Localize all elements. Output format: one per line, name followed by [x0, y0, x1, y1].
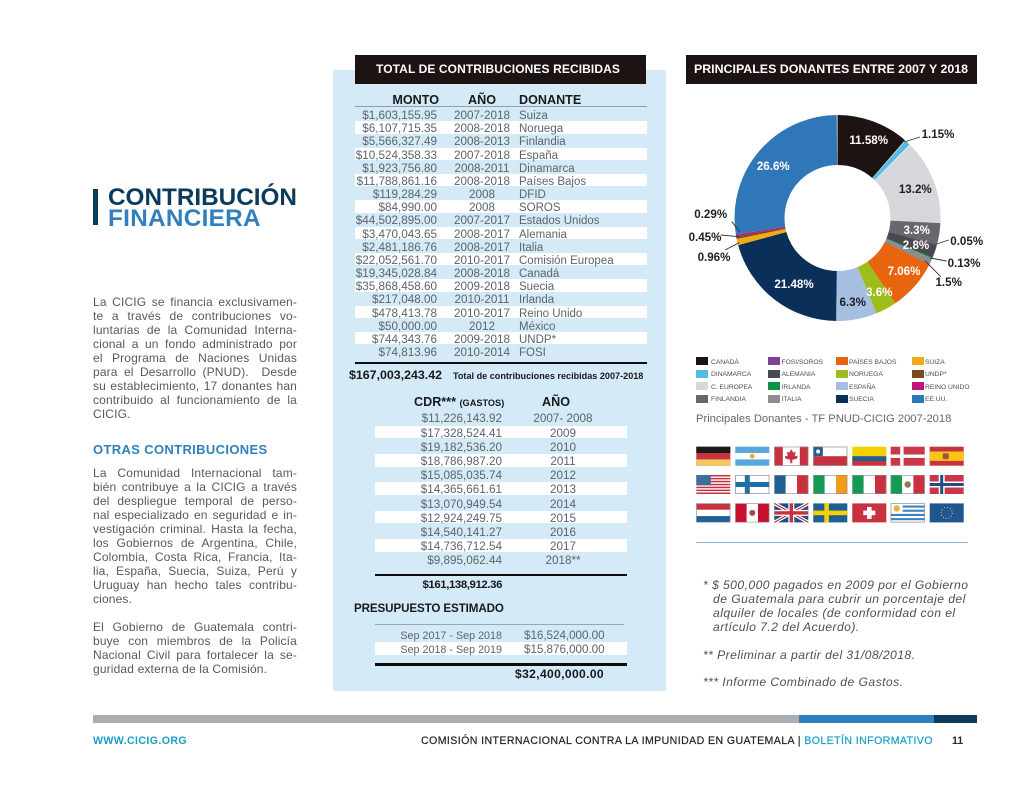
text block: otras contribuciones — [93, 466, 297, 606]
table: total de contribuciones: Canadá — [519, 268, 559, 280]
table: total de contribuciones: UNDP* — [519, 334, 556, 346]
legend: donantes: IRLANDA — [782, 384, 810, 391]
table: CDR gastos: $11,226,143.92 — [422, 412, 502, 425]
table: total de contribuciones: $167,003,243.42 — [349, 368, 442, 382]
table: total de contribuciones: 2007-2018 — [454, 148, 510, 162]
donut chart: principales donantes: 3.6% — [866, 286, 893, 299]
table: CDR gastos: $14,365,661.61 — [421, 483, 502, 496]
table: total de contribuciones: FOSI — [519, 347, 546, 359]
table: total de contribuciones: $11,788,861.16 — [357, 175, 437, 188]
table: total de contribuciones: $35,868,458.60 — [356, 280, 437, 293]
table: CDR gastos: $16,524,000.00 — [524, 629, 605, 642]
heading: principales donantes: PRINCIPALES DONANTES ENTRE 2007 Y 2018 — [694, 62, 968, 76]
table: CDR gastos: Sep 2018 - Sep 2019 — [400, 644, 502, 656]
footnotes: * $ 500,000 pagados en 2009 por el Gobierno — [703, 578, 968, 592]
donut chart: principales donantes: 26.6% — [757, 160, 790, 173]
table: CDR gastos: Sep 2017 - Sep 2018 — [400, 630, 502, 642]
table: total de contribuciones: 2008-2018 — [454, 175, 510, 188]
text block: otras contribuciones: del despliegue temporal de perso- — [93, 494, 297, 508]
flag: European Union — [930, 503, 964, 522]
table: CDR gastos: $17,328,524.41 — [421, 427, 502, 440]
table: total de contribuciones: Irlanda — [519, 294, 554, 306]
table: total de contribuciones: $1,603,155.95 — [362, 109, 437, 122]
table: total de contribuciones: Dinamarca — [519, 163, 575, 175]
table: total de contribuciones: $478,413.78 — [372, 307, 437, 320]
table: CDR gastos: 2017 — [550, 540, 576, 553]
table: total de contribuciones: Comisión Europea — [519, 255, 614, 267]
flag: Netherlands — [696, 503, 730, 522]
donut chart: principales donantes: 0.45% — [689, 231, 721, 244]
flag: USA — [696, 475, 730, 494]
flag: Switzerland — [852, 503, 886, 522]
table: total de contribuciones: 2010-2011 — [454, 293, 510, 306]
footnotes: *** Informe Combinado de Gastos. — [703, 675, 903, 689]
text block: intro — [93, 295, 297, 421]
legend: donantes: ESPAÑA — [849, 384, 876, 391]
table: CDR gastos: 2013 — [550, 483, 576, 496]
footer: website: WWW.CICIG.ORG — [93, 734, 187, 746]
text block: otras contribuciones: bién contribuye a la CICIG a través — [93, 480, 297, 494]
legend: donantes: DINAMARCA — [711, 371, 751, 378]
table: CDR gastos: 2015 — [550, 512, 576, 525]
legend: donantes: ALEMANIA — [782, 371, 815, 378]
legend: donantes: CANADÁ — [711, 358, 739, 366]
flag: Norway — [930, 475, 964, 494]
table: CDR gastos: 2011 — [550, 455, 576, 468]
donut chart: principales donantes: 1.15% — [922, 128, 954, 141]
legend: donantes: ITALIA — [782, 396, 801, 403]
table: CDR gastos: AÑO — [542, 395, 570, 409]
footnotes: de Guatemala para cubrir un porcentaje del — [713, 592, 966, 606]
donut chart: principales donantes: 11.58% — [849, 134, 888, 147]
legend: donantes: NORUEGA — [849, 371, 883, 378]
footnotes: ** Preliminar a partir del 31/08/2018. — [703, 648, 915, 662]
table: total de contribuciones: Países Bajos — [519, 176, 586, 188]
footer: publication line: COMISIÓN INTERNACIONAL CONTRA LA IMPUNIDAD EN GUATEMALA | BOLETÍN INFORMATIVO — [421, 734, 933, 746]
text block: gobierno de guatemala: buye con miembros de la Policía — [93, 634, 297, 648]
donut chart: principales donantes — [689, 115, 983, 321]
text block: otras contribuciones: lia, España, Suecia, Suiza, Perú y — [93, 564, 297, 578]
flag: Argentina — [735, 447, 769, 466]
legend: donantes: PAÍSES BAJOS — [849, 358, 896, 366]
table: total de contribuciones: 2010-2017 — [454, 307, 510, 320]
table: total de contribuciones: $2,481,186.76 — [362, 241, 437, 254]
table: total de contribuciones: Suiza — [519, 110, 548, 122]
text block: intro: La CICIG se financia exclusivamen- — [93, 295, 297, 309]
table: total de contribuciones: 2009-2018 — [454, 280, 510, 293]
text block: intro: su establecimiento, 17 donantes han — [93, 379, 297, 393]
table: total de contribuciones: 2008-2011 — [454, 162, 510, 175]
donut chart: principales donantes: 0.29% — [694, 208, 727, 221]
table: total de contribuciones: $3,470,043.65 — [362, 228, 437, 241]
table: total de contribuciones: MONTO — [392, 93, 439, 107]
text block: otras contribuciones: Uruguay han hecho tales contribu- — [93, 578, 297, 592]
table: total de contribuciones: 2012 — [469, 320, 495, 333]
legend: donantes: EE.UU. — [925, 396, 947, 403]
text block: gobierno de guatemala: Nacional Civil para fortalecer la se- — [93, 648, 297, 662]
flag: Ireland — [813, 475, 847, 494]
caption: principales donantes: Principales Donantes - TF PNUD-CICIG 2007-2018 — [696, 413, 951, 425]
table: total de contribuciones: 2009-2018 — [454, 333, 510, 346]
footnotes: alquiler de locales (de conformidad con el — [713, 606, 956, 620]
donut chart: principales donantes: 3.3% — [903, 224, 930, 237]
table: total de contribuciones: Estados Unidos — [519, 215, 600, 227]
table: total de contribuciones: Total de contribuciones recibidas 2007-2018 — [453, 371, 643, 381]
text block: otras contribuciones: vestigación criminal. Hasta la fecha, — [93, 522, 297, 536]
table: total de contribuciones: Noruega — [519, 123, 563, 135]
legend: donantes: SUIZA — [925, 358, 945, 366]
table: total de contribuciones: $10,524,358.33 — [356, 148, 437, 162]
donut chart: principales donantes: 21.48% — [774, 278, 814, 291]
table: total de contribuciones: México — [519, 321, 555, 333]
flag: Mexico — [891, 475, 925, 494]
donut chart: principales donantes: 0.13% — [948, 257, 980, 270]
text block: otras contribuciones: ciones. — [93, 592, 132, 606]
footer bar — [93, 715, 977, 723]
table: CDR gastos — [354, 394, 627, 680]
table: CDR gastos: $32,400,000.00 — [515, 666, 604, 680]
table: total de contribuciones: Reino Unido — [519, 308, 582, 320]
subheading: otras contribuciones: OTRAS CONTRIBUCIONES — [93, 442, 268, 457]
table: total de contribuciones: 2010-2017 — [454, 254, 510, 267]
flag: Finland — [735, 475, 769, 494]
donut chart: principales donantes: 1.5% — [935, 276, 962, 289]
table: CDR gastos: $14,540,141.27 — [421, 526, 502, 539]
table: total de contribuciones: $119,284.29 — [373, 188, 437, 201]
flag: France — [774, 475, 808, 494]
donut chart: principales donantes: 0.05% — [950, 235, 983, 248]
table: total de contribuciones: 2008-2017 — [454, 241, 510, 254]
donut chart: principales donantes: 0.96% — [698, 251, 730, 264]
table: total de contribuciones: $6,107,715.35 — [362, 122, 437, 135]
table: total de contribuciones: 2007-2018 — [454, 109, 510, 122]
flag: Colombia — [852, 447, 886, 466]
table: total de contribuciones: $744,343.76 — [372, 333, 437, 346]
footer: page number: 11 — [952, 734, 963, 746]
table: total de contribuciones: $74,813.96 — [378, 346, 437, 359]
text block: otras contribuciones: La Comunidad Internacional tam- — [93, 466, 297, 480]
table: CDR gastos: 2012 — [550, 469, 576, 482]
text block: gobierno de guatemala — [93, 620, 297, 676]
table: total de contribuciones: 2008-2018 — [454, 267, 510, 280]
table: total de contribuciones: $50,000.00 — [378, 320, 437, 333]
table: total de contribuciones: Italia — [519, 242, 543, 254]
table: total de contribuciones: $22,052,561.70 — [356, 254, 437, 267]
table: total de contribuciones: 2008-2013 — [454, 135, 510, 148]
text block: otras contribuciones: los Gobiernos de Argentina, Chile, — [93, 536, 297, 550]
legend: donantes: FINLANDIA — [711, 396, 746, 403]
table: CDR gastos: $13,070,949.54 — [421, 498, 502, 511]
table: total de contribuciones: $1,923,756.80 — [362, 162, 437, 175]
table: CDR gastos: 2007- 2008 — [533, 412, 593, 425]
legend: donantes: FOSI/SOROS — [782, 358, 823, 366]
footnotes — [703, 578, 968, 689]
table: CDR gastos: $15,876,000.00 — [524, 642, 605, 656]
flag: Peru — [735, 503, 769, 522]
legend: donantes: C. EUROPEA — [711, 384, 752, 391]
text block: gobierno de guatemala: guridad externa de la Comisión. — [93, 662, 267, 676]
table: total de contribuciones: España — [519, 150, 558, 162]
table: total de contribuciones: $84,990.00 — [378, 201, 437, 214]
table: CDR gastos: PRESUPUESTO ESTIMADO — [354, 602, 504, 615]
table: CDR gastos: $9,895,062.44 — [427, 554, 502, 567]
donut chart: principales donantes: 7.06% — [888, 265, 920, 278]
flag: Denmark — [891, 447, 925, 466]
flag: Italy — [852, 475, 886, 494]
text block: intro: luntarias de la Comunidad Interna- — [93, 323, 297, 337]
table: total de contribuciones — [349, 92, 647, 382]
table: CDR gastos: $12,924,249.75 — [421, 512, 502, 525]
flag: Sweden — [813, 503, 847, 522]
table: CDR gastos: 2018** — [545, 554, 581, 567]
table: total de contribuciones: 2007-2017 — [454, 214, 510, 227]
table: CDR gastos: 2014 — [550, 498, 576, 511]
table: CDR gastos: CDR*** (GASTOS) — [414, 395, 504, 409]
flag: Chile — [813, 447, 847, 466]
table: total de contribuciones: $44,502,895.00 — [356, 214, 437, 227]
legend: donantes: UNDP* — [925, 371, 947, 378]
table: total de contribuciones: $19,345,028.84 — [356, 267, 437, 280]
table: total de contribuciones: $217,048.00 — [372, 293, 437, 306]
text block: intro: para el Desarrollo (PNUD). Desde — [93, 365, 297, 379]
table: total de contribuciones: DFID — [519, 189, 546, 201]
text block: intro: CICIG. — [93, 407, 131, 421]
donut chart: principales donantes: 6.3% — [839, 296, 866, 309]
table: CDR gastos: 2016 — [550, 526, 576, 539]
table: total de contribuciones: 2008 — [469, 201, 495, 214]
table: CDR gastos: $161,138,912.36 — [422, 579, 502, 591]
table: total de contribuciones: 2010-2014 — [454, 346, 510, 359]
table: total de contribuciones: Finlandia — [519, 136, 566, 148]
section title: contribución financiera: FINANCIERA — [108, 205, 261, 232]
table: total de contribuciones: AÑO — [468, 93, 496, 107]
text block: intro: cional a un fondo administrado por — [93, 337, 297, 351]
table: total de contribuciones: 2008 — [469, 188, 495, 201]
text block: gobierno de guatemala: El Gobierno de Guatemala contri- — [93, 620, 297, 634]
legend: donantes: REINO UNIDO — [925, 384, 970, 391]
table: total de contribuciones: $5,566,327.49 — [362, 135, 437, 148]
table: CDR gastos: $18,786,987.20 — [421, 455, 502, 468]
heading: total de contribuciones — [355, 55, 646, 84]
table: CDR gastos: 2009 — [550, 427, 576, 440]
table: CDR gastos: $14,736,712.54 — [421, 540, 502, 553]
legend: donantes — [696, 357, 970, 403]
heading: principales donantes — [686, 55, 977, 84]
heading: total de contribuciones: TOTAL DE CONTRIBUCIONES RECIBIDAS — [376, 62, 620, 76]
text block: intro: contribuido al funcionamiento de la — [93, 393, 297, 407]
text block: intro: el Programa de Naciones Unidas — [93, 351, 297, 365]
flag: Uruguay — [891, 503, 925, 522]
text block: otras contribuciones: Colombia, Costa Rica, Francia, Ita- — [93, 550, 297, 564]
table: total de contribuciones: 2008-2017 — [454, 228, 510, 241]
table: CDR gastos: 2010 — [550, 441, 576, 454]
legend: donantes: SUECIA — [849, 396, 874, 403]
text block: intro: te a través de contribuciones vo- — [93, 309, 297, 323]
flag: Spain — [930, 447, 964, 466]
flag: United Kingdom — [774, 503, 808, 522]
table: CDR gastos: $19,182,536.20 — [421, 441, 502, 454]
divider under flags — [696, 542, 968, 543]
donut chart: principales donantes: 2.8% — [903, 239, 929, 252]
table: CDR gastos: $15,085,035.74 — [421, 469, 502, 482]
flag: Canada — [774, 447, 808, 466]
section title: contribución financiera: CONTRIBUCIÓN — [108, 184, 297, 211]
text block: otras contribuciones: nal especializado en seguridad e in- — [93, 508, 297, 522]
table: total de contribuciones: 2008-2018 — [454, 122, 510, 135]
donut chart: principales donantes: 13.2% — [899, 183, 932, 196]
panel: light blue table background — [333, 70, 666, 691]
table: total de contribuciones: Suecia — [519, 281, 554, 293]
section title: contribución financiera — [93, 183, 297, 232]
table: total de contribuciones: Alemania — [519, 229, 567, 241]
flags grid — [696, 446, 964, 523]
table: total de contribuciones: DONANTE — [519, 93, 581, 107]
table: total de contribuciones: SOROS — [519, 202, 561, 214]
flag: Germany — [696, 447, 730, 466]
footnotes: artículo 7.2 del Acuerdo). — [713, 620, 860, 634]
